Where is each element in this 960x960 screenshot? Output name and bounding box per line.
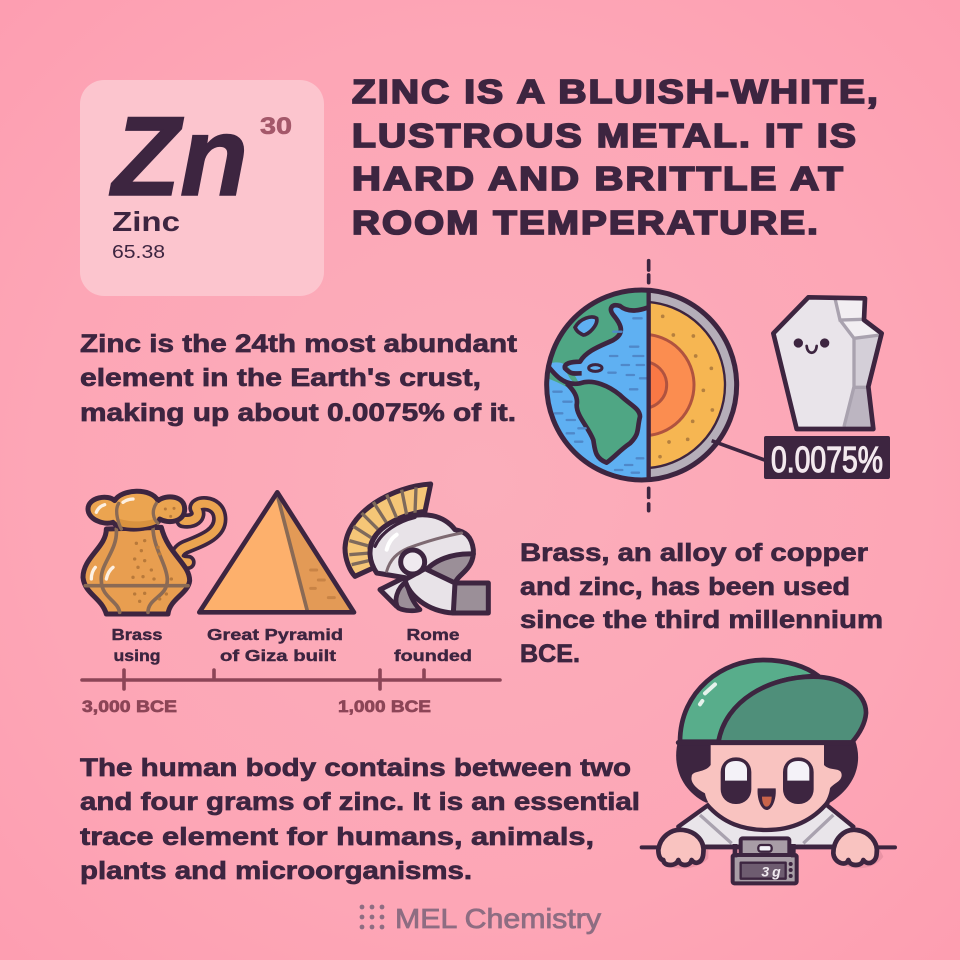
earth surface half <box>549 292 646 478</box>
timeline labels: founded <box>394 648 472 665</box>
timeline labels: Great Pyramid <box>207 627 343 644</box>
illustration: roman helmet <box>345 484 488 613</box>
table line <box>642 841 895 853</box>
neck guard <box>450 575 488 613</box>
text: abundance: Zinc is the 24th most abundant <box>80 330 518 358</box>
timeline labels: of Giza built <box>220 648 337 665</box>
timeline: 1,000 BCE <box>338 697 431 716</box>
text: human body: trace element for humans, animals, <box>80 823 594 851</box>
rim <box>88 491 185 529</box>
illustration: boy with scale <box>642 660 895 883</box>
text: human body: plants and microorganisms. <box>80 857 472 885</box>
heading: HARD AND BRITTLE AT <box>352 160 845 197</box>
hair <box>676 740 858 803</box>
cap <box>680 660 818 742</box>
heading <box>352 73 880 241</box>
label: 0.0075%: 0.0075% <box>771 439 883 480</box>
face <box>691 745 842 830</box>
timeline <box>82 670 500 716</box>
heading: ROOM TEMPERATURE. <box>352 204 820 241</box>
illustration: brass jug <box>83 491 220 614</box>
timeline labels <box>112 627 472 665</box>
visor shadow <box>424 554 473 584</box>
hands <box>658 830 704 865</box>
logo: MEL Chemistry: MEL Chemistry <box>395 903 601 934</box>
scale <box>741 838 789 858</box>
illustration: earth cross-section <box>543 261 765 511</box>
timeline labels: Brass <box>112 627 163 644</box>
text: human body: and four grams of zinc. It is an essential <box>80 788 640 816</box>
eyes <box>721 757 751 804</box>
text: human body <box>80 754 640 885</box>
illustration: smiling rock <box>773 297 882 429</box>
text: brass: and zinc, has been used <box>520 573 850 601</box>
text: abundance <box>80 330 518 427</box>
text: brass: BCE. <box>520 640 580 668</box>
cheek guard <box>380 578 407 606</box>
body <box>83 527 190 614</box>
logo dots <box>360 905 384 929</box>
handle <box>178 504 220 562</box>
mouth <box>758 788 776 810</box>
shirt <box>678 805 853 847</box>
text: brass <box>520 539 883 668</box>
text: abundance: element in the Earth's crust, <box>80 364 481 392</box>
text: human body: The human body contains between two <box>80 754 631 782</box>
atomic mass: 65.38 <box>112 242 165 262</box>
heading: LUSTROUS METAL. IT IS <box>352 117 858 154</box>
timeline labels: using <box>114 648 160 665</box>
text: brass: since the third millennium <box>520 606 883 634</box>
atomic number: 30 <box>260 113 292 140</box>
text: abundance: making up about 0.0075% of it. <box>80 399 516 427</box>
callout line <box>712 441 765 460</box>
illustration: pyramid <box>199 492 354 612</box>
illustration: boy with scale: 3g <box>761 864 781 880</box>
crest <box>345 484 431 576</box>
timeline labels: Rome <box>406 627 460 644</box>
timeline: 3,000 BCE <box>82 697 177 716</box>
hand shadows <box>660 850 883 869</box>
heading: ZINC IS A BLUISH-WHITE, <box>352 73 880 110</box>
earth interior half <box>650 293 734 477</box>
dome <box>370 515 473 578</box>
element symbol: Zn <box>109 94 248 219</box>
axis dashes <box>643 261 654 511</box>
element card: Zn <box>80 80 324 296</box>
element name: Zinc <box>112 206 180 237</box>
text: brass: Brass, an alloy of copper <box>520 539 868 567</box>
